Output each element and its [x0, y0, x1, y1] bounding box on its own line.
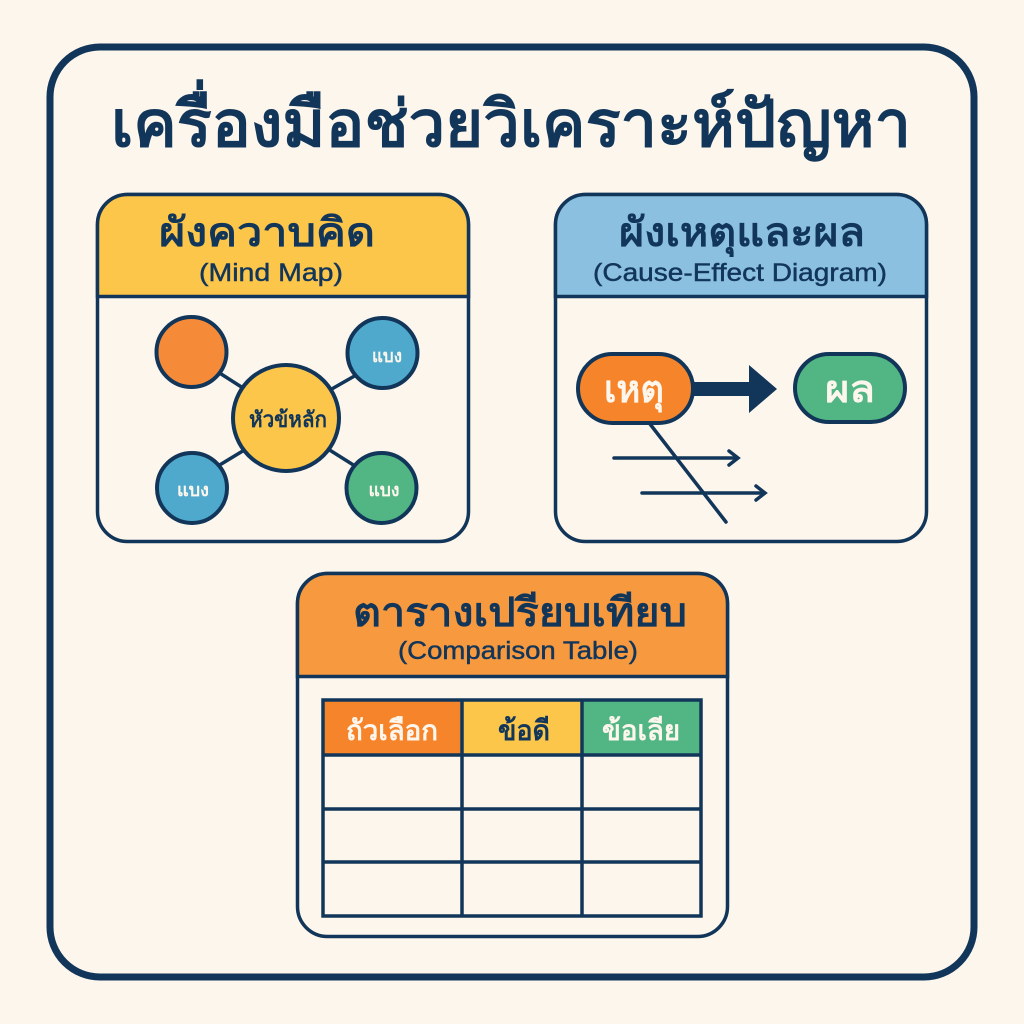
node: orange — [156, 317, 226, 387]
table header cell: option: ถัวเลือก — [346, 715, 438, 746]
mind map panel body — [98, 194, 468, 542]
cause effect heading: ผังเหตุและผล — [619, 211, 865, 258]
effect pill: ผล — [825, 369, 875, 411]
table header cell: cons — [582, 700, 701, 755]
node: central topic — [233, 365, 339, 471]
title: เครื่องมือช่วยวิเคราะห์ปัญหา — [111, 79, 911, 161]
panel: comparison table — [298, 574, 728, 936]
comparison heading: ตารางเปรียบเทียบ — [353, 591, 687, 635]
comparison subtitle: (Comparison Table) — [398, 637, 638, 665]
panel: cause and effect — [556, 194, 926, 542]
node: bottom right: แบง — [368, 480, 400, 500]
comparison header band — [298, 574, 728, 676]
fishbone diagonal — [650, 424, 726, 522]
mind map heading: ผังควาบคิด — [159, 211, 375, 255]
arrow: branch one — [614, 451, 738, 465]
comparison panel body — [298, 574, 728, 936]
table header cell: pros: ข้อดี — [498, 715, 550, 746]
node: bottom left — [157, 453, 227, 523]
table header cell: cons: ข้อเลีย — [602, 715, 680, 746]
node: central topic: หัวข้หลัก — [249, 407, 327, 432]
mind map subtitle: (Mind Map) — [199, 259, 343, 287]
cause effect panel body — [556, 194, 926, 542]
cause pill: เหตุ — [604, 369, 664, 413]
cause effect subtitle: (Cause-Effect Diagram) — [593, 259, 887, 287]
node: top right — [348, 318, 418, 388]
table — [323, 700, 701, 916]
mind map header band — [98, 194, 468, 296]
effect pill — [795, 354, 905, 422]
table header cell: option — [323, 700, 462, 755]
cause effect header band — [556, 194, 926, 296]
table header cell: pros — [462, 700, 582, 755]
table grid — [323, 700, 701, 916]
panel: mind map — [98, 194, 468, 542]
node: bottom left: แบง — [177, 480, 209, 500]
mind map connectors — [218, 372, 358, 466]
node: bottom right — [346, 453, 416, 523]
node: top right: แบง — [372, 346, 402, 366]
arrow: cause to effect — [690, 365, 777, 413]
arrow: branch two — [642, 486, 765, 500]
cause pill — [578, 354, 693, 423]
